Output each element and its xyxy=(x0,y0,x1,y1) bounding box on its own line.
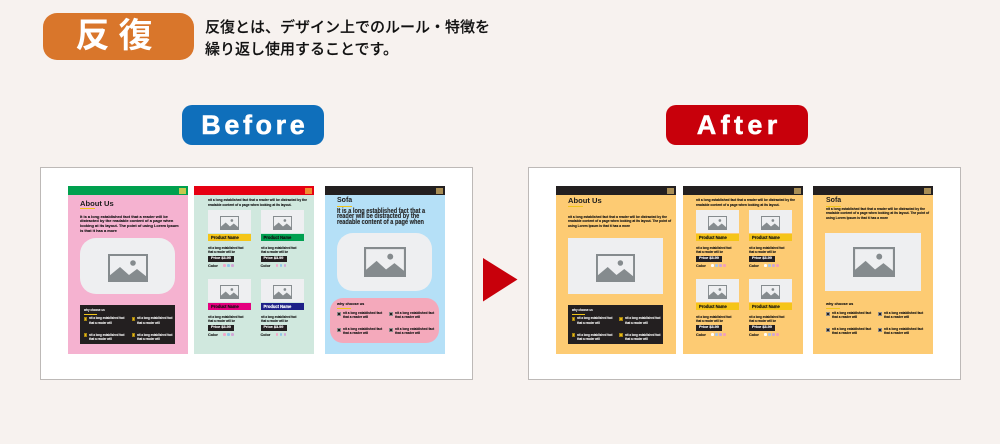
product card 3: Price $3.99 xyxy=(699,325,719,329)
product card 1: nit a long established fact xyxy=(208,246,243,250)
badge: Before xyxy=(182,105,324,145)
heading: Sofa xyxy=(337,197,352,204)
before screen 1: About Us xyxy=(68,186,188,354)
why choose us list: nit a long established fact xyxy=(832,310,871,314)
product card 2: that a reader will be xyxy=(749,250,776,254)
product card 2: Product Name xyxy=(752,235,780,240)
why choose us list: that a reader will xyxy=(884,315,909,319)
why choose us box: that a reader will xyxy=(577,337,600,341)
why choose us box: that a reader will xyxy=(136,321,159,325)
product card 4: Price $3.99 xyxy=(264,325,283,329)
product card 4: Color xyxy=(260,332,270,336)
why choose us box: nit a long established fact xyxy=(395,326,434,330)
why choose us box: that a reader will xyxy=(88,321,111,325)
intro text: readable content of a page when looking at its layout. xyxy=(696,202,779,206)
image placeholder xyxy=(80,238,174,294)
product card 2: that a reader will be xyxy=(260,250,287,254)
product card 4: nit a long established fact xyxy=(749,314,784,318)
product card 4: Product Name xyxy=(752,304,780,309)
why choose us box: that a reader will xyxy=(88,337,111,341)
product card 3: that a reader will be xyxy=(208,319,235,323)
product card 3 xyxy=(208,279,251,336)
intro text xyxy=(696,197,795,207)
why choose us box xyxy=(330,298,439,343)
why choose us box: why choose us xyxy=(337,302,364,306)
product card 1: Color xyxy=(208,264,218,268)
arrow xyxy=(483,258,518,302)
panel: after xyxy=(528,167,960,380)
overlapping paragraph: readable content of a page when xyxy=(337,217,424,226)
why choose us box: that a reader will xyxy=(395,315,420,319)
after screen 1: About Us xyxy=(556,186,676,354)
product card 2 xyxy=(749,210,792,268)
why choose us box: why choose us xyxy=(572,308,593,312)
paragraph xyxy=(568,214,672,228)
image placeholder xyxy=(568,238,663,294)
why choose us box: nit a long established fact xyxy=(136,332,172,336)
paragraph: readable content of a page when looking at its layout. The point of xyxy=(568,218,671,223)
overlapping paragraph: It is a long established fact that a xyxy=(337,206,425,215)
why choose us box: that a reader will xyxy=(577,321,600,325)
paragraph: readable content of a page when looking at its layout. The point of xyxy=(826,210,929,215)
product card 2: Color xyxy=(749,264,759,268)
product card 1: Product Name xyxy=(699,235,727,240)
why choose us list: nit a long established fact xyxy=(884,310,923,314)
product card 2: Color xyxy=(260,264,270,268)
why choose us box: why choose us xyxy=(84,308,104,312)
why choose us box: nit a long established fact xyxy=(88,332,124,336)
product card 1: Price $3.99 xyxy=(211,256,231,260)
image placeholder xyxy=(337,233,432,290)
product card 1: that a reader will be xyxy=(696,250,723,254)
why choose us box: that a reader will xyxy=(624,321,647,325)
product card 2: Product Name xyxy=(264,235,291,240)
overlapping paragraph: reader will be distracted by the xyxy=(337,211,419,220)
why choose us box xyxy=(568,305,663,344)
overlapping paragraph xyxy=(337,206,426,226)
product card 4: Color xyxy=(749,332,759,336)
product card 3 xyxy=(696,279,739,336)
before screen 2: products xyxy=(194,186,314,354)
paragraph xyxy=(80,214,179,233)
why choose us box: nit a long established fact xyxy=(624,316,660,320)
product card 3: nit a long established fact xyxy=(696,314,731,318)
product card 4: nit a long established fact xyxy=(260,314,296,318)
why choose us box: nit a long established fact xyxy=(88,316,124,320)
why choose us box: nit a long established fact xyxy=(577,332,612,336)
badge: After: After xyxy=(697,110,782,140)
paragraph: It is a long established fact that a reader will be xyxy=(80,214,168,218)
product card 3: Color xyxy=(696,332,706,336)
heading badge: 反復 xyxy=(43,13,194,60)
why choose us list: nit a long established fact xyxy=(884,326,923,330)
paragraph: nit a long established fact that a reader will be distracted by the xyxy=(826,206,924,210)
product card 2: nit a long established fact xyxy=(749,246,784,250)
product card 3: nit a long established fact xyxy=(208,314,243,318)
intro text: nit a long established fact that a reader will be distracted by the xyxy=(696,197,795,202)
why choose us box: nit a long established fact xyxy=(342,310,382,314)
product card 4: Price $3.99 xyxy=(752,325,772,329)
why choose us box: nit a long established fact xyxy=(395,310,434,314)
why choose us list: that a reader will xyxy=(832,315,857,319)
product card 1: Price $3.99 xyxy=(699,256,719,260)
why choose us box: nit a long established fact xyxy=(624,332,660,336)
why choose us box: nit a long established fact xyxy=(136,316,172,320)
heading badge: 反復: 反復 xyxy=(76,17,162,55)
panel: before xyxy=(40,167,472,380)
product card 1: Color xyxy=(696,264,706,268)
product card 4 xyxy=(749,279,792,336)
why choose us box: that a reader will xyxy=(395,331,420,335)
before screen 3: Sofa xyxy=(324,186,444,354)
product card 2: nit a long established fact xyxy=(260,246,296,250)
product card 3: Price $3.99 xyxy=(211,325,231,329)
why choose us box: nit a long established fact xyxy=(577,316,612,320)
product card 4: that a reader will be xyxy=(749,319,776,323)
why choose us box: that a reader will xyxy=(342,315,368,319)
product card 1 xyxy=(696,210,739,268)
paragraph: using Lorem Ipsum is that it has a more xyxy=(826,215,887,220)
paragraph: using Lorem Ipsum is that it has a more xyxy=(568,223,630,228)
product card 4: Product Name xyxy=(264,304,291,309)
intro text: nit a long established fact that a reader will be distracted by the xyxy=(208,197,307,202)
product card 1 xyxy=(208,210,251,268)
why choose us box: that a reader will xyxy=(342,331,368,335)
product card 2: Price $3.99 xyxy=(264,256,283,260)
why choose us list xyxy=(826,302,924,335)
image placeholder xyxy=(825,233,921,290)
product card 4 xyxy=(260,279,304,336)
badge: After xyxy=(666,105,808,145)
why choose us box: that a reader will xyxy=(624,337,647,341)
paragraph xyxy=(826,206,930,220)
intro text: readable content of a page when looking at its layout. xyxy=(208,202,291,206)
description text: 繰り返し使用することです。 xyxy=(205,40,398,58)
product card 1: Product Name xyxy=(211,235,239,240)
why choose us list: that a reader will xyxy=(884,331,909,335)
description text xyxy=(205,19,490,58)
product card 3: that a reader will be xyxy=(696,319,723,323)
why choose us box: that a reader will xyxy=(136,337,159,341)
why choose us box: nit a long established fact xyxy=(342,326,382,330)
paragraph: is that it has a more xyxy=(80,228,117,233)
product card 2: Price $3.99 xyxy=(752,256,772,260)
product card 3: Product Name xyxy=(699,304,727,309)
paragraph: looking at its layout. The point of using Lorem Ipsum xyxy=(80,223,179,228)
why choose us list: that a reader will xyxy=(832,331,857,335)
product card 3: Product Name xyxy=(211,304,239,309)
product card 2 xyxy=(260,210,304,268)
badge: Before: Before xyxy=(201,110,308,140)
why choose us box xyxy=(80,305,174,344)
product card 1: nit a long established fact xyxy=(696,246,731,250)
product card 3: Color xyxy=(208,332,218,336)
heading: Sofa xyxy=(826,197,841,204)
product card 4: that a reader will be xyxy=(260,319,287,323)
product card 1: that a reader will be xyxy=(208,250,235,254)
paragraph: distracted by the readable content of a page when xyxy=(80,218,173,223)
intro text xyxy=(208,197,307,207)
why choose us list: why choose us xyxy=(826,302,853,306)
heading: About Us xyxy=(80,198,114,208)
after screen 2: products xyxy=(682,186,802,354)
paragraph: nit a long established fact that a reader will be distracted by the xyxy=(568,214,667,218)
after screen 3: Sofa xyxy=(813,186,933,354)
heading: About Us xyxy=(568,196,602,205)
description text: 反復とは、デザイン上でのルール・特徴を xyxy=(205,19,490,36)
why choose us list: nit a long established fact xyxy=(832,326,871,330)
